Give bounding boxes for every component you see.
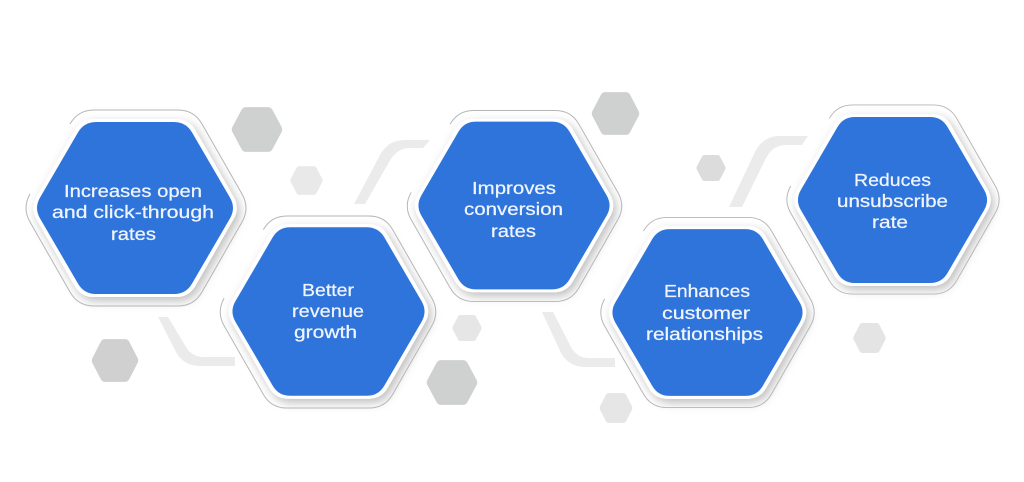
hexagon 1: Increases open and click-through rates bbox=[26, 110, 246, 306]
decorative hexagon: lower centre dark bbox=[427, 360, 477, 405]
decorative hexagon: top left light bbox=[290, 166, 323, 195]
connector: step 4 to step 5 bbox=[729, 136, 808, 207]
connector: step 1 to step 2 bbox=[158, 317, 235, 366]
hexagon 2: Better revenue growth bbox=[220, 216, 436, 408]
label: step 5: rate bbox=[872, 212, 908, 232]
label: step 5 bbox=[837, 170, 948, 232]
label: step 2: growth bbox=[294, 322, 357, 342]
hexagon 4: Enhances customer relationships bbox=[601, 217, 814, 408]
decorative hexagon: lower centre light bbox=[452, 315, 482, 341]
label: step 1 bbox=[52, 181, 214, 244]
label: step 4: relationships bbox=[646, 324, 763, 344]
label: step 5: unsubscribe bbox=[837, 191, 948, 211]
label: step 4: customer bbox=[662, 303, 750, 323]
connector: step 2 to step 3 bbox=[354, 140, 430, 204]
label: step 5: Reduces bbox=[854, 170, 931, 190]
hexagon 3: Improves conversion rates bbox=[407, 110, 622, 302]
connector: step 3 to step 4 bbox=[542, 312, 615, 367]
decorative hexagon: top left dark bbox=[232, 107, 282, 152]
decorative hexagon: lower right bbox=[853, 323, 886, 353]
decorative hexagon: top centre dark bbox=[592, 92, 639, 135]
label: step 1: rates bbox=[111, 224, 156, 244]
label: step 1: and click-through bbox=[52, 202, 214, 222]
label: step 4 bbox=[646, 281, 763, 344]
label: step 2: Better bbox=[302, 280, 354, 300]
hexagon 5: Reduces unsubscribe rate bbox=[787, 105, 999, 294]
decorative hexagon: bottom centre light bbox=[600, 393, 632, 423]
label: step 2 bbox=[292, 280, 364, 342]
label: step 3: Improves bbox=[472, 178, 556, 198]
label: step 3: rates bbox=[491, 221, 536, 241]
decorative hexagon: bottom left dark bbox=[92, 339, 138, 382]
label: step 4: Enhances bbox=[664, 281, 750, 301]
label: step 2: revenue bbox=[292, 301, 364, 321]
label: step 3: conversion bbox=[464, 199, 563, 219]
label: step 3 bbox=[464, 178, 563, 241]
label: step 1: Increases open bbox=[64, 181, 202, 201]
decorative hexagon: upper right bbox=[696, 155, 726, 181]
